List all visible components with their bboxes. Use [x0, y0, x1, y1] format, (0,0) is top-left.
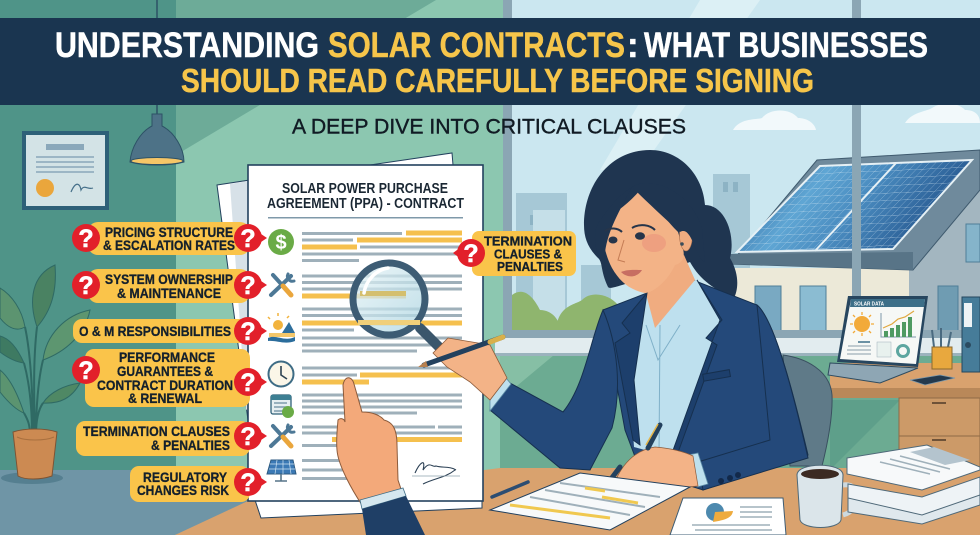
hair back and ponytail: [584, 150, 737, 298]
desk surface: [175, 363, 980, 535]
laptop with solar data: [828, 296, 928, 383]
subtitle: A DEEP DIVE INTO CRITICAL CLAUSES: [292, 116, 686, 138]
contract text lines: [302, 230, 462, 480]
clause: termination: ?: [240, 423, 256, 451]
callout: termination clauses on the right: PENALTIES: [497, 259, 563, 274]
clause: system ownership: ?: [240, 272, 256, 300]
clause: regulatory changes: REGULATORY: [143, 470, 227, 485]
city buildings: [516, 174, 750, 309]
clause: system ownership: [72, 269, 267, 303]
clause: system ownership: & MAINTENANCE: [117, 286, 221, 301]
icon: tools second: [271, 425, 294, 446]
paper being marked on desk: [490, 473, 690, 530]
icon: tools: [271, 274, 294, 295]
title: UNDERSTANDING: [55, 26, 319, 65]
icon: dollar: [268, 229, 294, 255]
house roof: [730, 150, 980, 270]
magnifying glass: [353, 263, 464, 372]
clause: system ownership: SYSTEM OWNERSHIP: [105, 272, 233, 287]
report with pie chart: [670, 498, 786, 535]
right arm sleeve: [698, 305, 808, 490]
eyes and brows: [605, 225, 655, 262]
left arm sleeve reaching to the document: [490, 310, 618, 470]
framed certificate: [22, 131, 109, 210]
header banner: [0, 18, 980, 105]
clause: termination: [76, 421, 267, 456]
clause: regulatory changes: ?: [240, 469, 256, 497]
woman reviewing the contract: [490, 150, 808, 492]
document title: AGREEMENT (PPA) - CONTRACT: [267, 196, 464, 212]
pen in right hand: [602, 424, 660, 492]
signature: [412, 463, 460, 484]
clause: performance guarantees: & RENEWAL: [128, 391, 202, 406]
office chair: [783, 355, 832, 466]
clause: pricing structure: & ESCALATION RATES: [103, 238, 235, 253]
icon: sun and water: [268, 313, 295, 343]
pen cup: [932, 328, 952, 369]
icon: dollar: $: [275, 232, 287, 254]
window view: sky, city and house with solar roof: [503, 0, 980, 340]
title: [55, 26, 928, 99]
stack of papers: [847, 445, 980, 524]
pointing hand: [337, 378, 425, 535]
solar panels: [737, 160, 972, 252]
mini chart and donut: [858, 341, 870, 343]
sun icon: [854, 316, 870, 332]
house wall: [734, 268, 909, 330]
binders: [962, 297, 980, 372]
clause: o and m: ?: [240, 318, 256, 346]
trees: [512, 292, 625, 330]
left shirt cuff: [490, 378, 511, 411]
clause: regulatory changes: CHANGES RISK: [137, 483, 229, 498]
clause: system ownership: ?: [78, 272, 94, 300]
clause: performance guarantees: ?: [240, 369, 256, 397]
plant leaves: [0, 265, 90, 413]
coffee mug: [797, 465, 857, 528]
clause: pricing structure: ?: [78, 225, 94, 253]
small pen on desk: [492, 482, 528, 497]
neck: [645, 255, 695, 328]
icon: calendar: [271, 395, 294, 418]
document title: SOLAR POWER PURCHASE: [282, 181, 448, 197]
title: SHOULD READ CAREFULLY BEFORE SIGNING: [181, 62, 814, 99]
clause: regulatory changes: [130, 466, 267, 502]
side icons column: [267, 229, 296, 481]
title: WHAT BUSINESSES: [644, 26, 928, 65]
window frame: [495, 0, 980, 356]
clause: o and m: [73, 317, 267, 346]
clause: termination: TERMINATION CLAUSES: [83, 424, 230, 439]
face: [600, 190, 684, 293]
smartphone: [910, 375, 955, 385]
clause: performance guarantees: [72, 349, 267, 407]
clause: pricing structure: ?: [240, 225, 256, 253]
right hand: [613, 447, 698, 492]
clause: performance guarantees: GUARANTEES &: [117, 364, 213, 379]
bar chart: [881, 313, 916, 337]
icon: clock: [268, 362, 294, 386]
clause: performance guarantees: CONTRACT DURATION: [97, 378, 233, 393]
contract document: [248, 165, 483, 501]
clouds: [733, 104, 980, 130]
potted plant: [0, 265, 90, 484]
mouth: [621, 270, 642, 276]
title: SOLAR CONTRACTS: [328, 26, 625, 65]
back contract sheets: [217, 153, 482, 518]
pendant lamp: [130, 0, 184, 165]
callout: termination clauses on the right: [453, 231, 576, 276]
callout: termination clauses on the right: TERMINATION: [484, 234, 572, 248]
document title: [267, 181, 464, 212]
lapels: [615, 293, 647, 445]
clause: performance guarantees: PERFORMANCE: [119, 350, 215, 365]
ear and earring: [680, 219, 692, 251]
clause: pricing structure: [72, 222, 267, 255]
laptop with solar data: SOLAR DATA: [854, 302, 884, 308]
right cuff: [688, 453, 708, 487]
callout: termination clauses on the right: CLAUSES &: [494, 246, 562, 262]
blazer body: [603, 280, 808, 490]
shirt: [630, 280, 720, 458]
hand holding magnifier and pen: [418, 337, 507, 400]
clause: performance guarantees: ?: [78, 357, 94, 385]
hair front: [595, 183, 705, 268]
clause: o and m: O & M RESPONSIBILITIES: [79, 324, 231, 339]
clause: termination: & PENALTIES: [151, 438, 230, 453]
title: :: [627, 26, 639, 65]
callout: termination clauses on the right: ?: [463, 240, 479, 268]
icon: solar panel: [267, 460, 296, 481]
callout list of critical clauses: [72, 222, 267, 502]
clause: pricing structure: PRICING STRUCTURE: [105, 225, 233, 240]
